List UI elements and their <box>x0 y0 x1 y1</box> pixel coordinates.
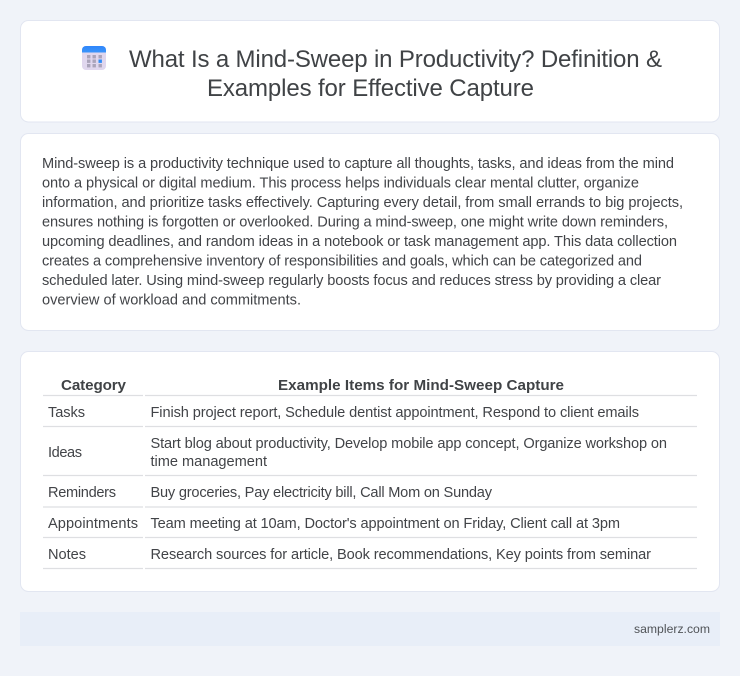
panel: title header <box>20 20 720 122</box>
footer <box>20 612 720 646</box>
table header <box>61 377 564 394</box>
text block: definition: overview of workload and commitments. <box>42 292 301 308</box>
table header: Category <box>61 377 127 394</box>
text block: definition: ensures nothing is forgotten or overlooked. During a mind-sweep, one might write down reminders, <box>42 214 668 230</box>
title: What Is a Mind-Sweep in Productivity? Definition & <box>129 46 662 73</box>
title <box>129 46 662 102</box>
text block: definition: creates a comprehensive inventory of responsibilities and goals, which can be categorized and <box>42 254 642 270</box>
footer: samplerz.com <box>634 622 710 636</box>
title: Examples for Effective Capture <box>207 75 534 102</box>
text block: definition: upcoming deadlines, and random ideas in a notebook or task management app. This data collection <box>42 234 677 250</box>
table row: appointments: Appointments <box>48 516 138 532</box>
table row: ideas: time management <box>150 454 267 470</box>
table row: tasks: Finish project report, Schedule dentist appointment, Respond to client emails <box>150 405 639 421</box>
table row: ideas: Start blog about productivity, Develop mobile app concept, Organize workshop on <box>150 436 667 452</box>
table row: appointments: Team meeting at 10am, Doctor's appointment on Friday, Client call at 3pm <box>150 516 620 532</box>
text block: definition: Mind-sweep is a productivity technique used to capture all thoughts, tasks, and ideas from the mind <box>42 156 674 172</box>
text block: definition: onto a physical or digital medium. This process helps individuals clear mental clutter, organize <box>42 176 639 192</box>
table row: notes: Research sources for article, Book recommendations, Key points from seminar <box>150 547 651 563</box>
table row: notes: Notes <box>48 547 86 563</box>
panel: example items table <box>20 352 720 592</box>
table row: tasks: Tasks <box>48 405 85 421</box>
icon: calendar <box>82 46 106 70</box>
text block: definition <box>42 156 683 308</box>
table row: reminders: Buy groceries, Pay electricity bill, Call Mom on Sunday <box>150 485 493 501</box>
text block: definition: scheduled later. Using mind-sweep regularly boosts focus and reduces stress by providing a clear <box>42 273 661 289</box>
table row: ideas: Ideas <box>48 445 82 461</box>
panel: definition paragraph <box>20 134 720 330</box>
table row: reminders: Reminders <box>48 485 116 501</box>
table row: ideas <box>48 436 667 470</box>
table header: Example Items for Mind-Sweep Capture <box>278 377 564 394</box>
text block: definition: information, and prioritize tasks effectively. Capturing every detail, from small errands to big projects, <box>42 195 683 211</box>
